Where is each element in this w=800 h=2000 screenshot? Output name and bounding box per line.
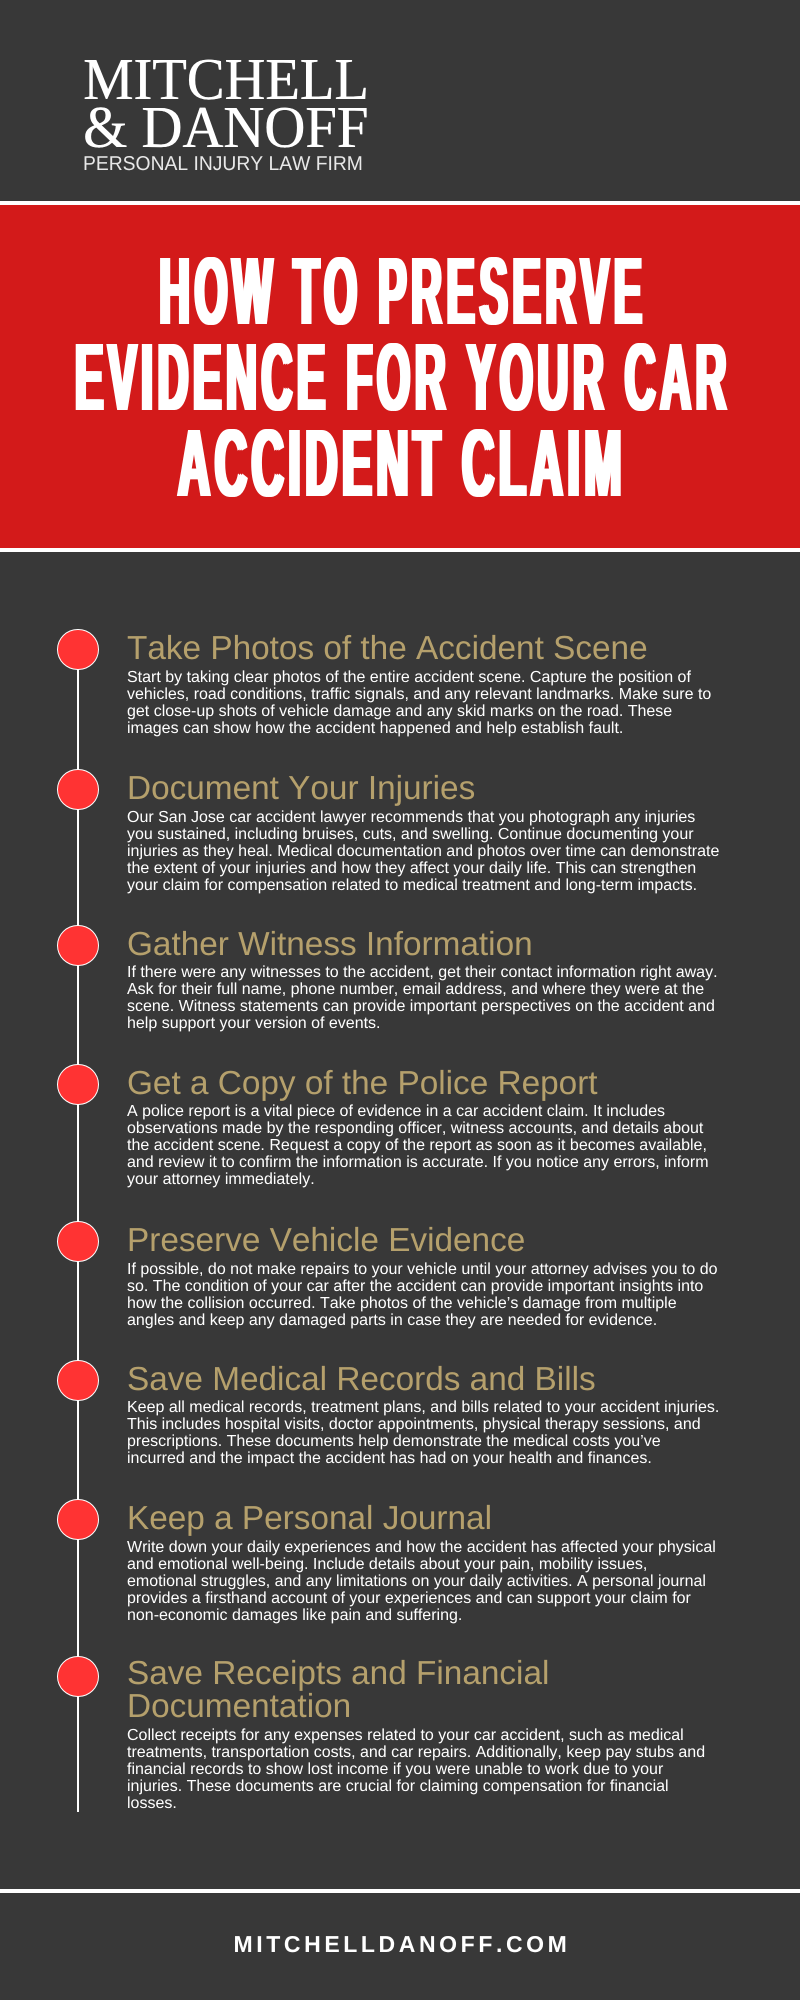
step body text: Collect receipts for any expenses related to your car accident, such as medical: [127, 1727, 684, 1744]
step body text: Start by taking clear photos of the entire accident scene. Capture the position of: [127, 669, 691, 686]
logo line: Mitchell: MITCHELL: [83, 46, 369, 112]
marker dot: [57, 629, 98, 670]
marker dot: [57, 1360, 98, 1401]
step body text: your claim for compensation related to medical treatment and long-term impacts.: [127, 877, 697, 894]
step body text: injuries. These documents are crucial for claiming compensation for financial: [127, 1778, 669, 1795]
footer website: MITCHELLDANOFF.COM: [234, 1931, 570, 1957]
step body text: [127, 1103, 709, 1188]
step 7: personal journal: [57, 1499, 716, 1624]
step body text: A police report is a vital piece of evidence in a car accident claim. It includes: [127, 1103, 665, 1120]
step body text: the extent of your injuries and how they affect your daily life. This can strengthen: [127, 860, 696, 877]
step body text: [127, 1399, 719, 1467]
title banner: [0, 201, 800, 552]
step body text: Write down your daily experiences and how the accident has affected your physical: [127, 1539, 716, 1556]
marker dot: [57, 925, 98, 966]
step 8: receipts and financial documentation: [57, 1655, 705, 1812]
step heading: Save Receipts and Financial: [127, 1655, 549, 1692]
step body text: help support your version of events.: [127, 1015, 380, 1032]
step 6: medical records: [57, 1360, 719, 1467]
step body text: [127, 1539, 716, 1624]
timeline vertical line: [77, 650, 79, 1812]
marker dot: [57, 1064, 98, 1105]
footer divider: [0, 1889, 800, 1893]
step heading: Keep a Personal Journal: [127, 1500, 492, 1537]
step body text: get close-up shots of vehicle damage and any skid marks on the road. These: [127, 703, 672, 720]
step body text: [127, 964, 718, 1032]
step body text: emotional struggles, and any limitations on your daily activities. A personal journal: [127, 1573, 706, 1590]
step body text: financial records to show lost income if you were unable to work due to your: [127, 1761, 663, 1778]
step body text: scene. Witness statements can provide important perspectives on the accident and: [127, 998, 715, 1015]
marker dot: [57, 1221, 98, 1262]
logo line: & Danoff: & DANOFF: [83, 94, 368, 160]
step body text: [127, 1727, 705, 1812]
step body text: losses.: [127, 1795, 177, 1812]
step body text: Ask for their full name, phone number, email address, and where they were at the: [127, 981, 704, 998]
step body text: angles and keep any damaged parts in case they are needed for evidence.: [127, 1312, 657, 1329]
step body text: so. The condition of your car after the accident can provide important insights into: [127, 1278, 703, 1295]
title line 2: EVIDENCE FOR YOUR CAR: [75, 324, 731, 431]
marker dot: [57, 769, 98, 810]
step 4: police report: [57, 1064, 709, 1188]
step body text: injuries as they heal. Medical documentation and photos over time can demonstrate: [127, 843, 719, 860]
step body text: provides a firsthand account of your experiences and can support your claim for: [127, 1590, 691, 1607]
step body text: treatments, transportation costs, and car repairs. Additionally, keep pay stubs and: [127, 1744, 705, 1761]
step heading: Take Photos of the Accident Scene: [127, 630, 648, 667]
step body text: incurred and the impact the accident has had on your health and finances.: [127, 1450, 652, 1467]
step heading: Document Your Injuries: [127, 770, 475, 807]
logo tagline: PERSONAL INJURY LAW FIRM: [83, 153, 363, 175]
step heading: Preserve Vehicle Evidence: [127, 1222, 525, 1259]
step body text: the accident scene. Request a copy of the report as soon as it becomes available,: [127, 1137, 707, 1154]
step 5: vehicle evidence: [57, 1221, 718, 1329]
step 1: take photos: [57, 629, 711, 737]
header logo: [83, 46, 369, 175]
step body text: If possible, do not make repairs to your vehicle until your attorney advises you to do: [127, 1261, 718, 1278]
step body text: Keep all medical records, treatment plans, and bills related to your accident injuries.: [127, 1399, 719, 1416]
step heading: Gather Witness Information: [127, 926, 533, 963]
step body text: observations made by the responding officer, witness accounts, and details about: [127, 1120, 703, 1137]
step heading: Get a Copy of the Police Report: [127, 1065, 598, 1102]
step heading: Documentation: [127, 1688, 351, 1725]
marker dot: [57, 1499, 98, 1540]
step body text: [127, 669, 711, 737]
step body text: [127, 809, 719, 894]
step body text: and review it to confirm the information is accurate. If you notice any errors, inform: [127, 1154, 709, 1171]
step body text: vehicles, road conditions, traffic signals, and any relevant landmarks. Make sure to: [127, 686, 711, 703]
step body text: and emotional well-being. Include details about your pain, mobility issues,: [127, 1556, 647, 1573]
step 3: witness information: [57, 925, 718, 1032]
step heading: [127, 1655, 549, 1725]
step body text: non-economic damages like pain and suffering.: [127, 1607, 462, 1624]
title line 3: ACCIDENT CLAIM: [178, 410, 626, 517]
title line 1: HOW TO PRESERVE: [159, 238, 647, 345]
step body text: Our San Jose car accident lawyer recommends that you photograph any injuries: [127, 809, 695, 826]
step body text: you sustained, including bruises, cuts, and swelling. Continue documenting your: [127, 826, 694, 843]
step heading: Save Medical Records and Bills: [127, 1361, 596, 1398]
step 2: document injuries: [57, 769, 719, 894]
step body text: [127, 1261, 718, 1329]
step body text: your attorney immediately.: [127, 1171, 315, 1188]
step body text: This includes hospital visits, doctor appointments, physical therapy sessions, and: [127, 1416, 701, 1433]
marker dot: [57, 1656, 98, 1697]
step body text: If there were any witnesses to the accident, get their contact information right away.: [127, 964, 718, 981]
step body text: prescriptions. These documents help demonstrate the medical costs you’ve: [127, 1433, 661, 1450]
step body text: how the collision occurred. Take photos of the vehicle’s damage from multiple: [127, 1295, 677, 1312]
step body text: images can show how the accident happened and help establish fault.: [127, 720, 623, 737]
